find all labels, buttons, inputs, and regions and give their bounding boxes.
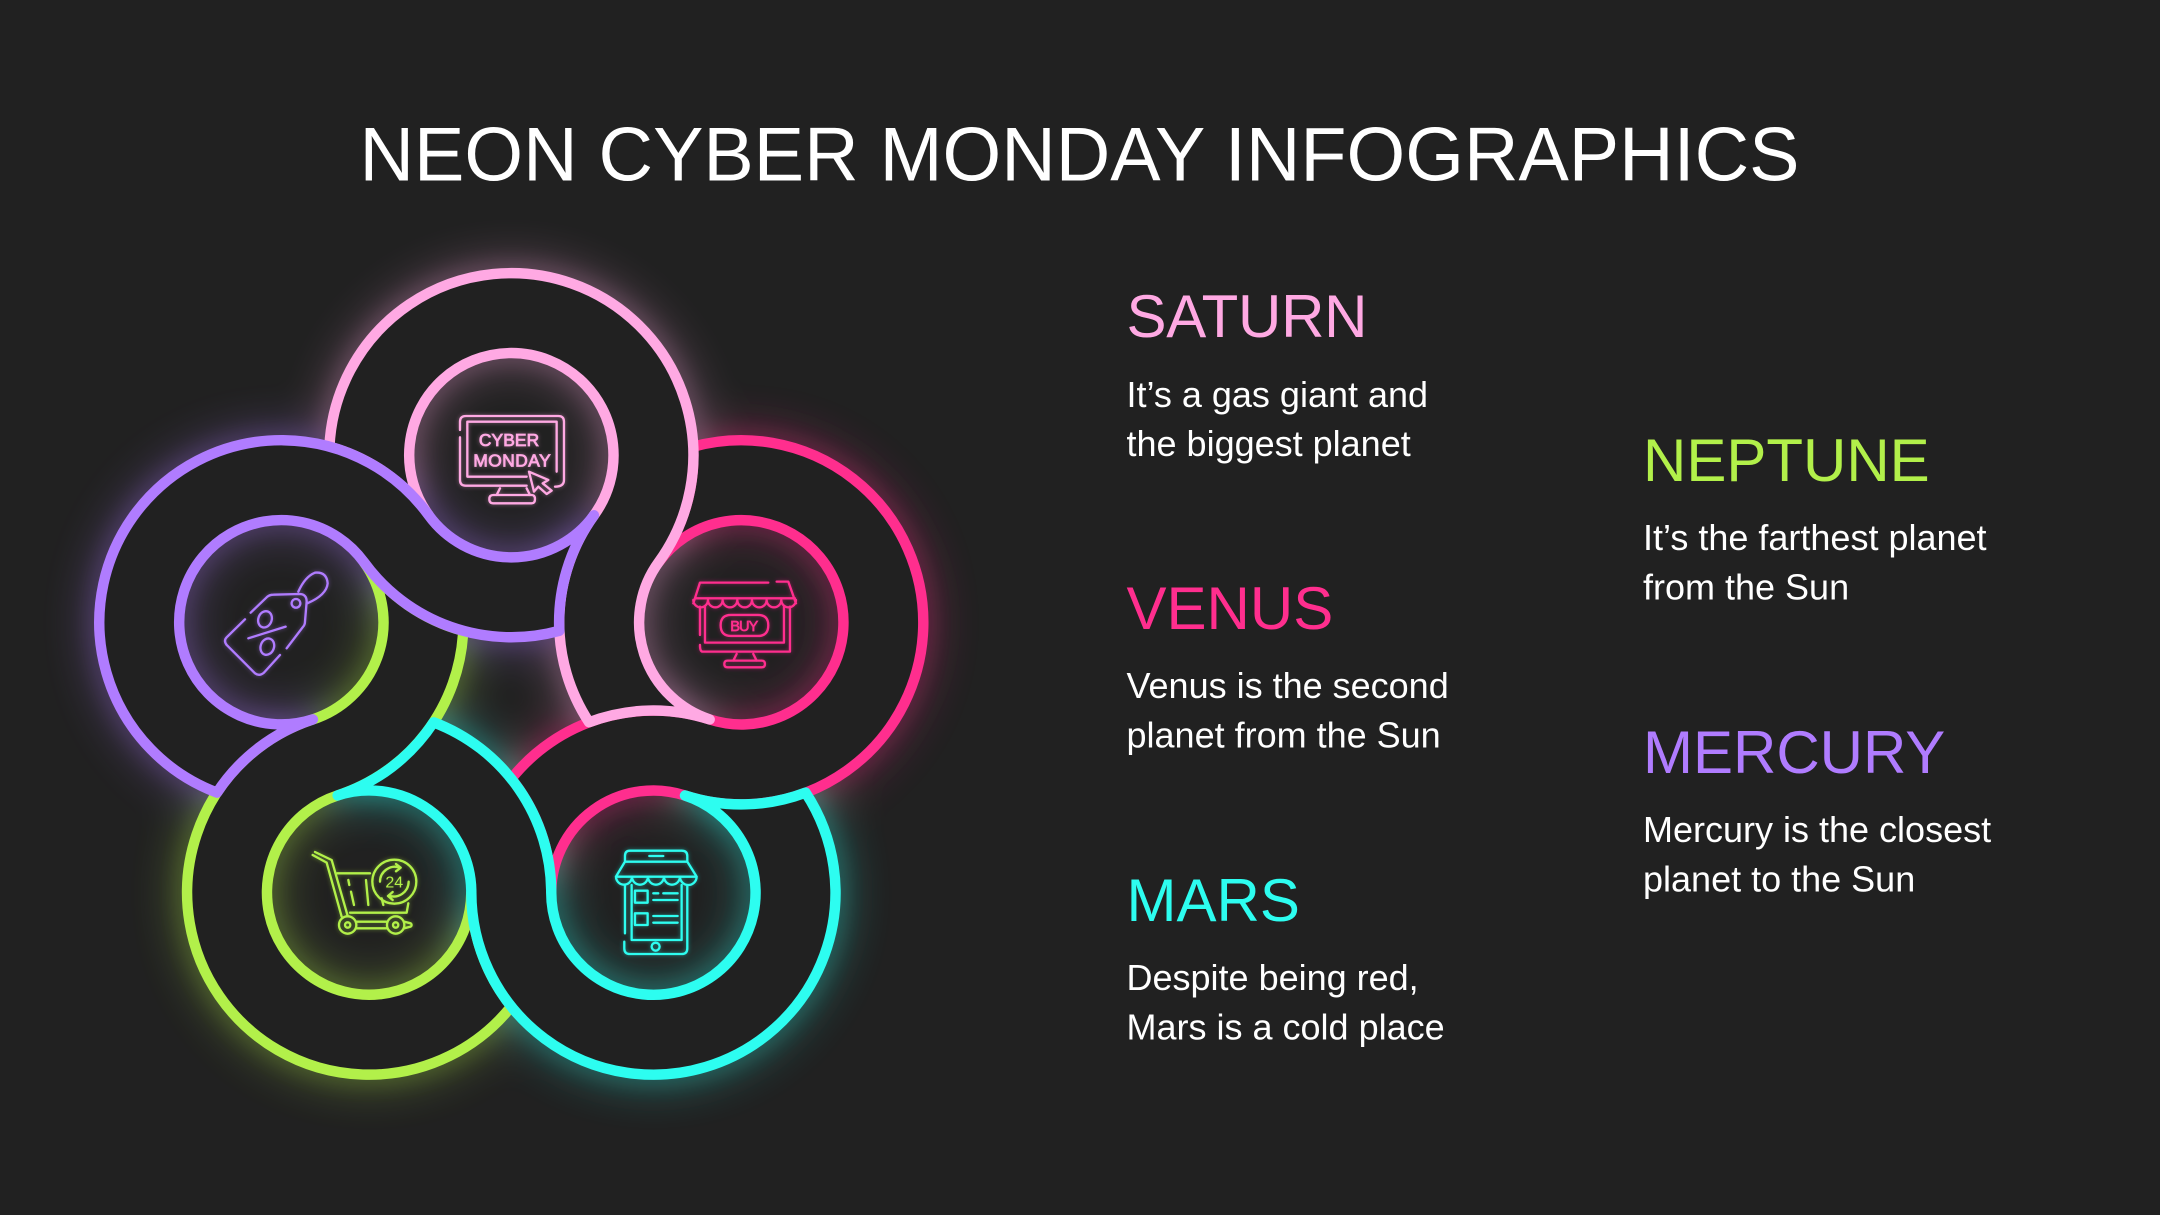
text block: Saturn: the biggest planet bbox=[1126, 423, 1411, 464]
text block: Mercury: planet to the Sun bbox=[1643, 858, 1915, 900]
icon: 24 hour shopping cart bbox=[313, 852, 416, 934]
text block: Neptune: It’s the farthest planet bbox=[1643, 517, 1987, 558]
text block: Mars bbox=[1126, 867, 1445, 1048]
text block: Venus: VENUS bbox=[1126, 575, 1333, 642]
spiral bands bbox=[99, 226, 996, 1147]
text block: Neptune: from the Sun bbox=[1643, 566, 1849, 608]
text block: Mercury: MERCURY bbox=[1643, 719, 1945, 786]
icon: 24 hour shopping cart: 24 bbox=[385, 874, 403, 891]
text block: Mars: MARS bbox=[1126, 867, 1300, 934]
text block: Mercury: Mercury is the closest bbox=[1643, 809, 1991, 850]
icon: cyber monday monitor: CYBER bbox=[479, 430, 539, 450]
band: Mercury bbox=[99, 440, 594, 793]
text block: Neptune bbox=[1643, 427, 1987, 608]
band: Neptune bbox=[140, 539, 628, 1118]
neon glow layer bbox=[99, 226, 996, 1147]
icon: percent price tag bbox=[225, 573, 328, 675]
icon: cyber monday monitor bbox=[460, 416, 564, 503]
text block: Mercury bbox=[1643, 719, 1991, 900]
text block: Saturn bbox=[1126, 283, 1428, 464]
text block: Saturn: SATURN bbox=[1126, 283, 1368, 350]
icon: buy storefront: BUY bbox=[730, 619, 759, 635]
band: Saturn bbox=[293, 226, 781, 805]
icon: mobile phone store bbox=[616, 851, 697, 954]
text block: Venus: Venus is the second bbox=[1126, 665, 1449, 706]
band: Venus bbox=[388, 377, 996, 953]
text block: Mars: Mars is a cold place bbox=[1126, 1006, 1445, 1048]
text block: Venus: planet from the Sun bbox=[1126, 714, 1441, 756]
text block: Venus bbox=[1126, 575, 1449, 756]
text block: Mars: Despite being red, bbox=[1126, 957, 1419, 998]
icon: cyber monday monitor: MONDAY bbox=[473, 451, 551, 471]
icon: buy storefront bbox=[693, 582, 796, 667]
title: NEON CYBER MONDAY INFOGRAPHICS bbox=[360, 112, 1800, 198]
text block: Saturn: It’s a gas giant and bbox=[1126, 374, 1428, 415]
band: Mars bbox=[293, 571, 901, 1147]
text block: Neptune: NEPTUNE bbox=[1643, 427, 1930, 494]
